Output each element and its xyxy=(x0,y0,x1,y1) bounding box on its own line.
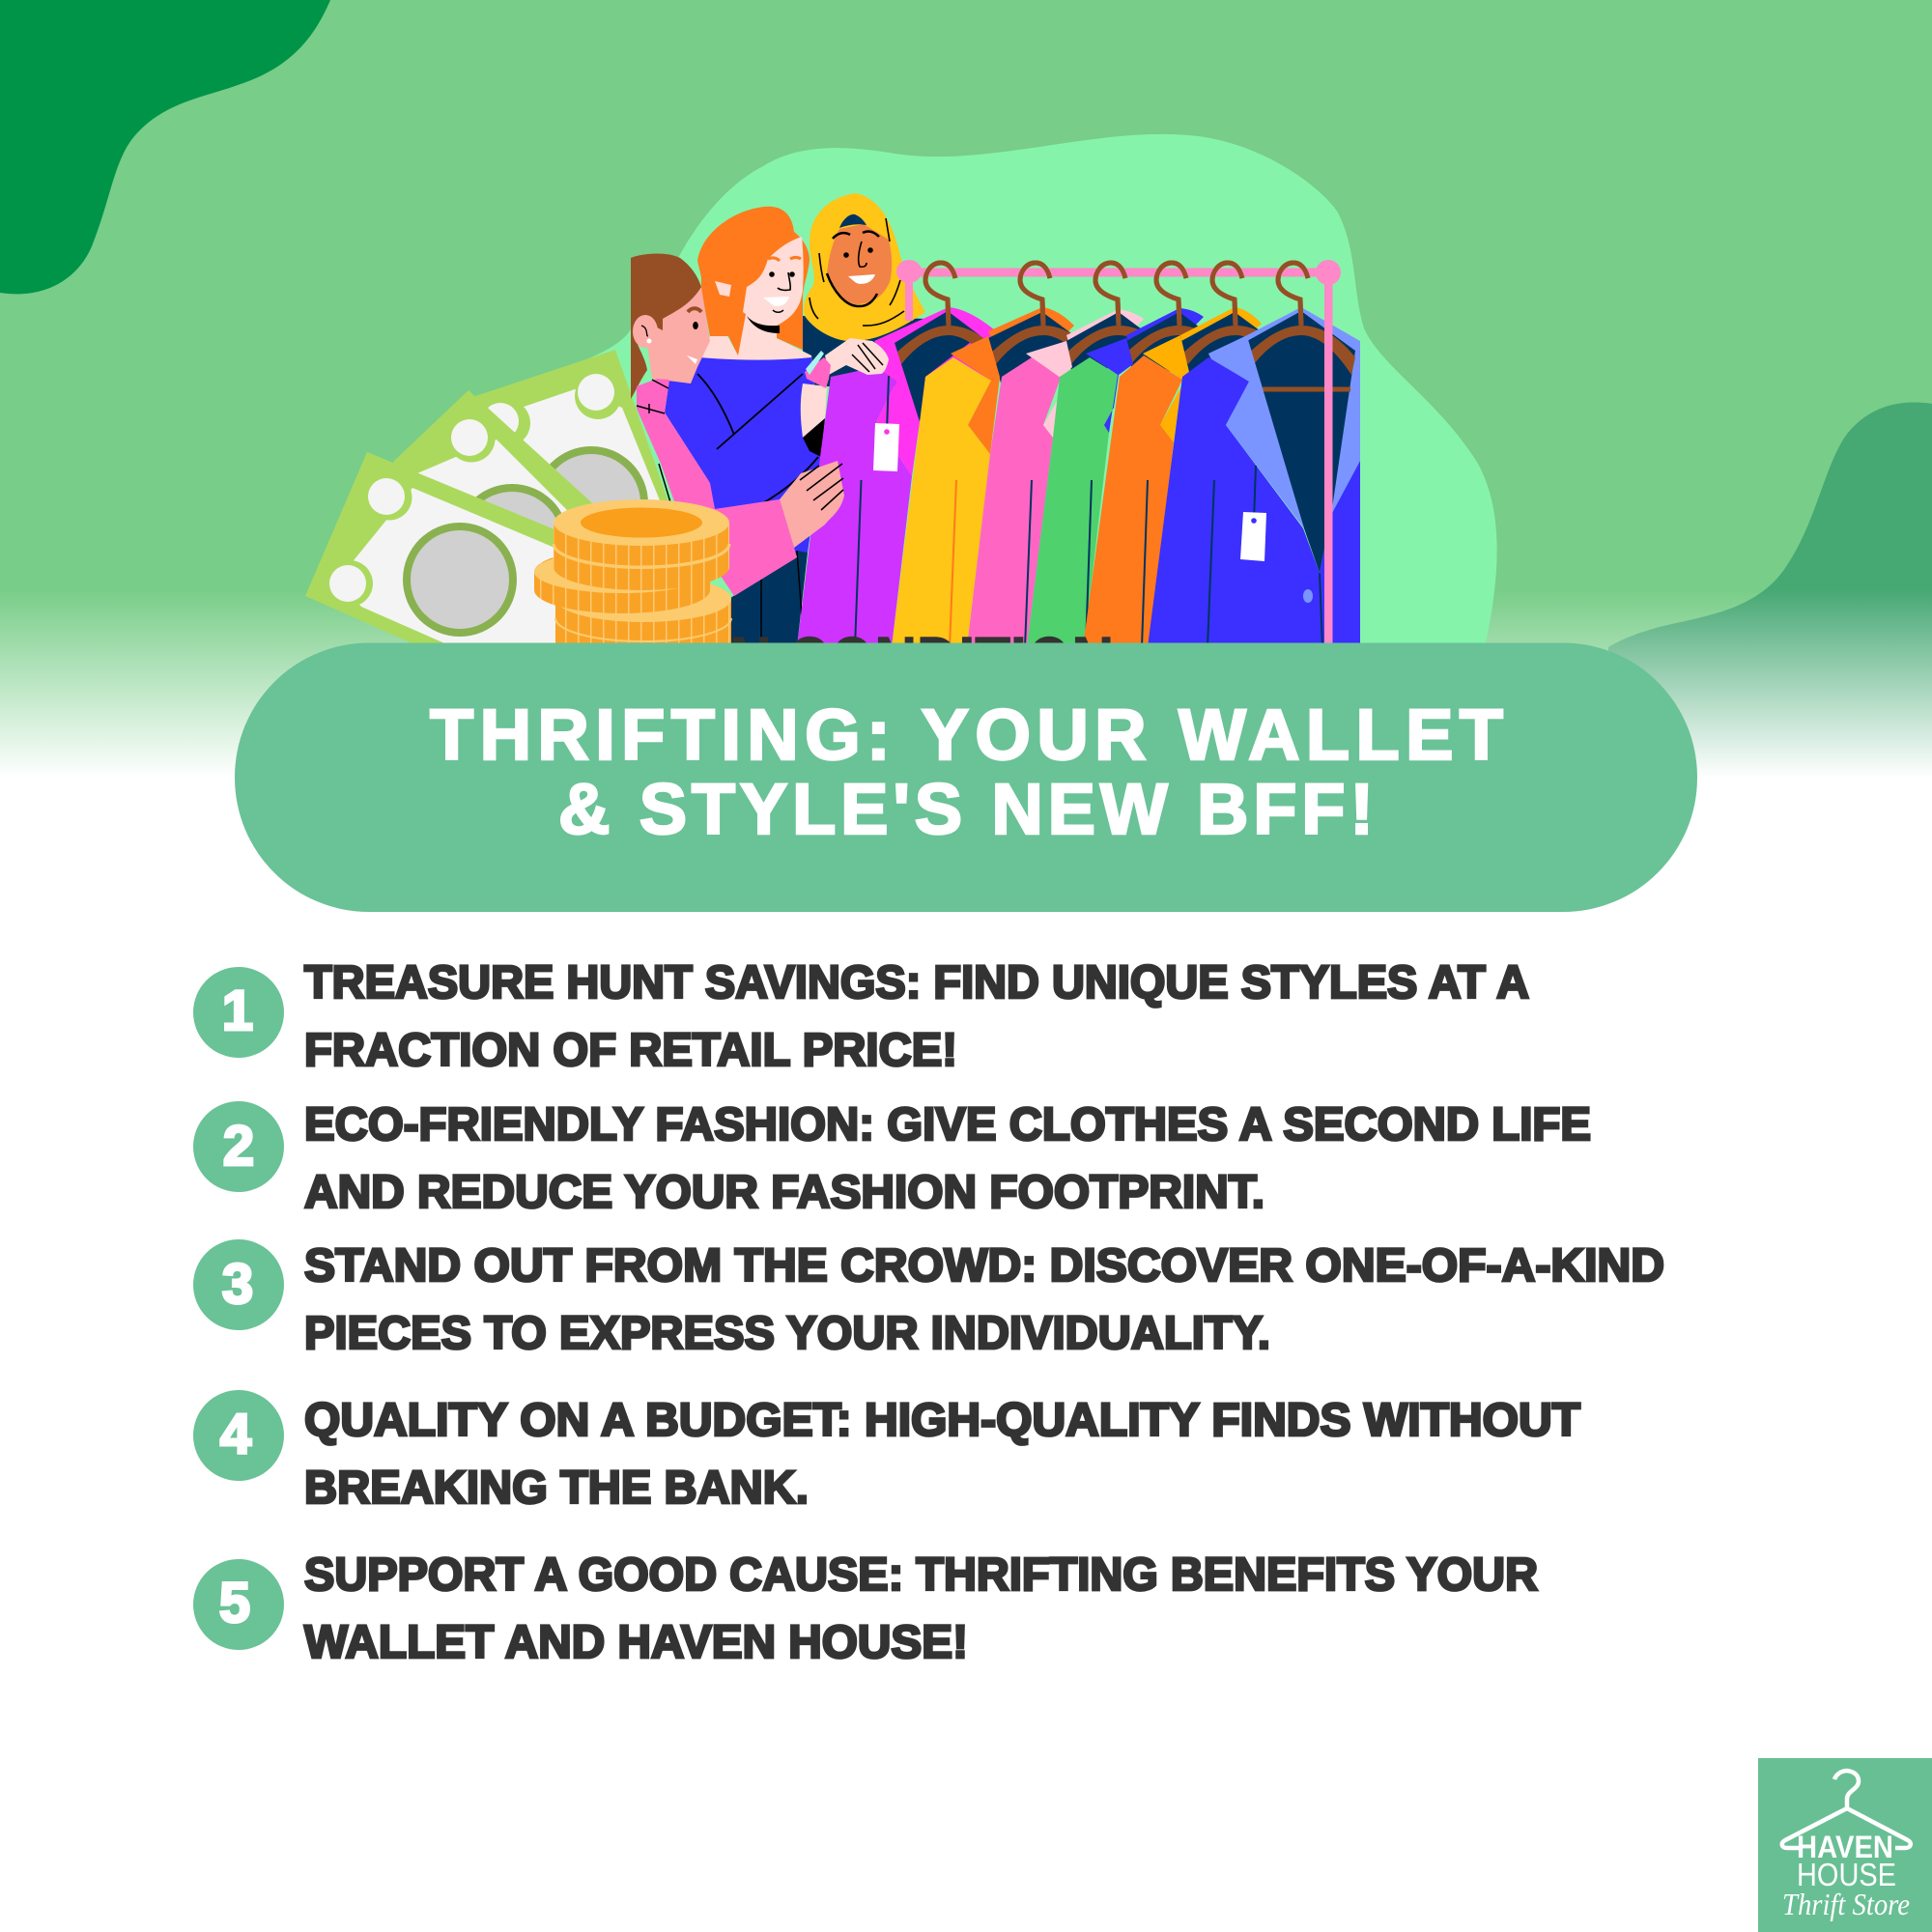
coins stack xyxy=(534,499,732,643)
blob: top-left dark green xyxy=(0,0,330,294)
person: hijab woman xyxy=(803,193,927,386)
list item 3 xyxy=(193,1239,1664,1359)
list item 3: PIECES TO EXPRESS YOUR INDIVIDUALITY. xyxy=(304,1308,1270,1359)
list item 1: TREASURE HUNT SAVINGS: FIND UNIQUE STYLES AT A xyxy=(304,957,1529,1009)
list item 5: SUPPORT A GOOD CAUSE: THRIFTING BENEFITS YOUR xyxy=(304,1549,1538,1601)
list item 5: WALLET AND HAVEN HOUSE! xyxy=(304,1617,968,1668)
person: orange hair woman xyxy=(665,207,827,647)
hidden text behind title: N CONDITION xyxy=(729,621,1114,707)
title text xyxy=(430,695,1503,849)
garment: orange coat xyxy=(1084,261,1262,643)
list item 3: STAND OUT FROM THE CROWD: DISCOVER ONE-OF-A-KIND xyxy=(304,1240,1664,1292)
banknote front xyxy=(305,452,555,643)
logo: Haven House Thrift Store: HOUSE xyxy=(1797,1857,1896,1892)
list item 1: 1 xyxy=(222,980,253,1042)
logo: Haven House Thrift Store xyxy=(1758,1758,1932,1932)
list item 3: 3 xyxy=(222,1253,253,1316)
list item 5 xyxy=(193,1549,1538,1668)
list item 2: AND REDUCE YOUR FASHION FOOTPRINT. xyxy=(304,1167,1264,1218)
list item 4 xyxy=(193,1390,1580,1514)
garment: purple coat xyxy=(797,263,1008,647)
garment: green coat xyxy=(1028,261,1204,643)
garment: blue jacket xyxy=(1148,263,1360,647)
title text: & STYLE'S NEW BFF! xyxy=(558,769,1374,849)
illustration: thrift shopping scene xyxy=(305,133,1497,643)
list item 2: ECO-FRIENDLY FASHION: GIVE CLOTHES A SECOND LIFE xyxy=(304,1099,1591,1151)
title text: THRIFTING: YOUR WALLET xyxy=(430,695,1503,775)
list item 2: 2 xyxy=(223,1115,254,1178)
list item 4: BREAKING THE BANK. xyxy=(304,1463,809,1514)
banknote middle xyxy=(393,390,593,527)
icon: hanger xyxy=(1782,1771,1911,1848)
header fade to white xyxy=(0,589,1932,778)
money: three banknotes xyxy=(305,350,668,643)
logo: Haven House Thrift Store: HAVEN xyxy=(1797,1830,1893,1864)
list item 4: QUALITY ON A BUDGET: HIGH-QUALITY FINDS WITHOUT xyxy=(304,1395,1580,1446)
list item 5: 5 xyxy=(219,1572,250,1634)
banknote back xyxy=(475,350,668,503)
blob: right mid green xyxy=(1608,403,1932,777)
garment: pink coat xyxy=(967,263,1173,647)
blob: light green behind scene xyxy=(587,133,1497,643)
list item 1 xyxy=(193,957,1529,1076)
header green background xyxy=(0,0,1932,777)
garment: yellow coat xyxy=(893,261,1074,643)
list item 1: FRACTION OF RETAIL PRICE! xyxy=(304,1025,957,1076)
clothing rack xyxy=(896,260,1341,649)
list item 2 xyxy=(193,1099,1591,1218)
hands on garment xyxy=(715,338,889,596)
person: brown hair woman xyxy=(631,253,797,596)
title panel xyxy=(235,643,1697,912)
list item 4: 4 xyxy=(220,1403,251,1465)
logo: Haven House Thrift Store: Thrift Store xyxy=(1782,1887,1910,1921)
